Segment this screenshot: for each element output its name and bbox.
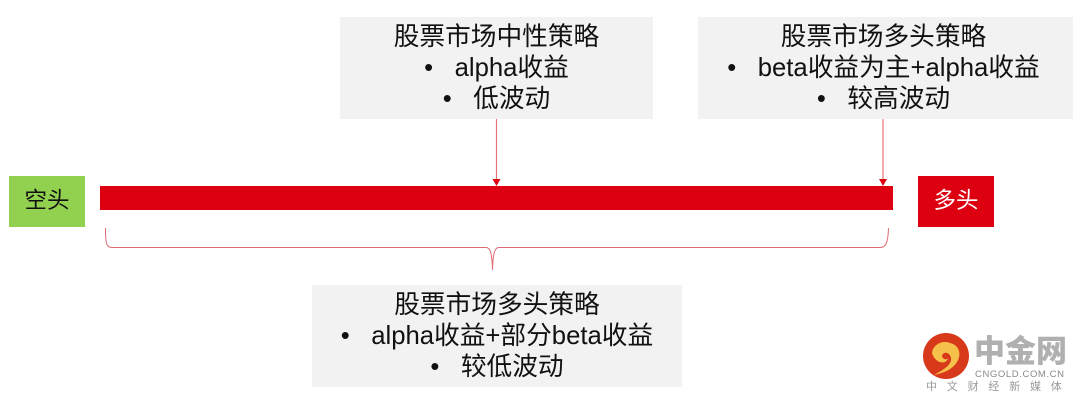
icon: logo swirl (923, 333, 969, 379)
panel: long equity strategy (698, 17, 1073, 119)
logo tagline: 中文财经新媒体 (926, 381, 1072, 393)
logo: cngold (923, 326, 1072, 393)
label: long (918, 176, 994, 227)
text: low volatility: • 低波动 (443, 85, 550, 113)
logo url: CNGOLD.COM.CN (975, 369, 1065, 380)
label: long: 多头 (933, 188, 978, 213)
panel: market neutral strategy (340, 17, 653, 119)
label: short (9, 176, 85, 227)
text: alpha return: • alpha收益 (424, 54, 569, 82)
text: beta plus alpha: • beta收益为主+alpha收益 (727, 54, 1040, 82)
text: lower volatility: • 较低波动 (430, 353, 564, 381)
heading: long equity: 股票市场多头策略 (781, 23, 986, 51)
main red bar (100, 186, 893, 210)
logo wordmark: 中金网 (974, 326, 1067, 371)
label: short: 空头 (24, 188, 70, 213)
heading: market neutral: 股票市场中性策略 (394, 23, 599, 51)
text: higher volatility: • 较高波动 (817, 85, 950, 113)
text: alpha plus partial beta: • alpha收益+部分beta收益 (341, 322, 653, 350)
panel: partial beta long strategy (312, 285, 682, 387)
heading: long equity: 股票市场多头策略 (394, 291, 600, 319)
